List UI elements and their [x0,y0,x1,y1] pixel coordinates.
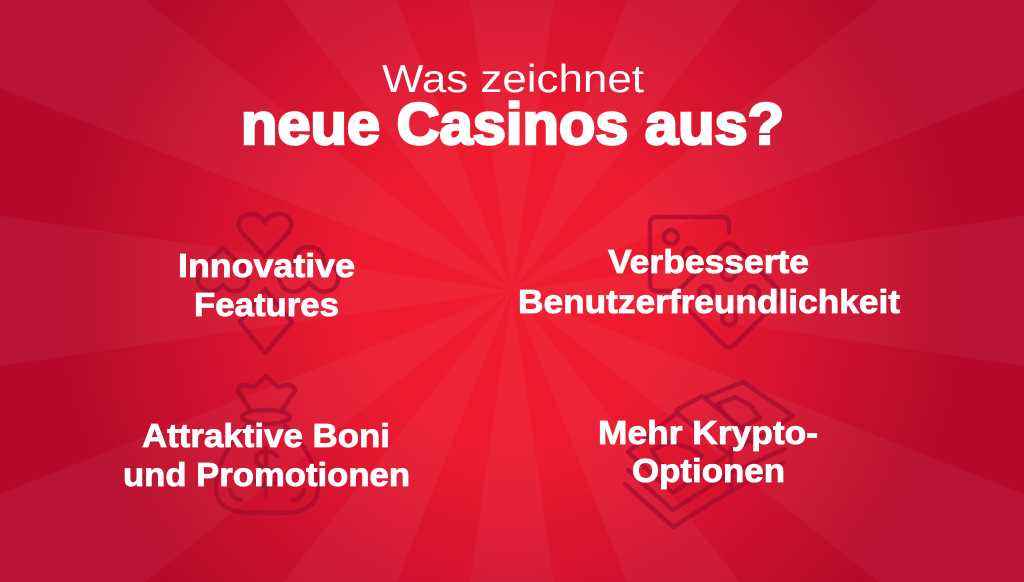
label line 2: und Promotionen [123,456,410,493]
label line 2: Benutzerfreundlichkeit [518,283,900,320]
label line 2: Features [194,286,339,323]
label line 2: Optionen [632,452,785,489]
title [241,58,784,157]
title line 2: neue Casinos aus? [241,92,784,157]
panel: mehr krypto-optionen [598,382,818,527]
label: Mehr Krypto- [598,414,818,451]
label: Innovative [178,247,355,284]
icon: money bag [216,376,318,513]
panel: innovative features [178,214,355,353]
label: Verbesserte [608,243,809,280]
panel: attraktive boni [123,376,410,513]
label: Attraktive Boni [142,417,390,454]
panel: verbesserte benutzerfreundlichkeit [518,217,900,347]
icon: card suits [198,214,338,353]
icon: dice [650,217,781,347]
title line 1: Was zeichnet [382,58,644,101]
icon: banknote stack [625,382,793,527]
